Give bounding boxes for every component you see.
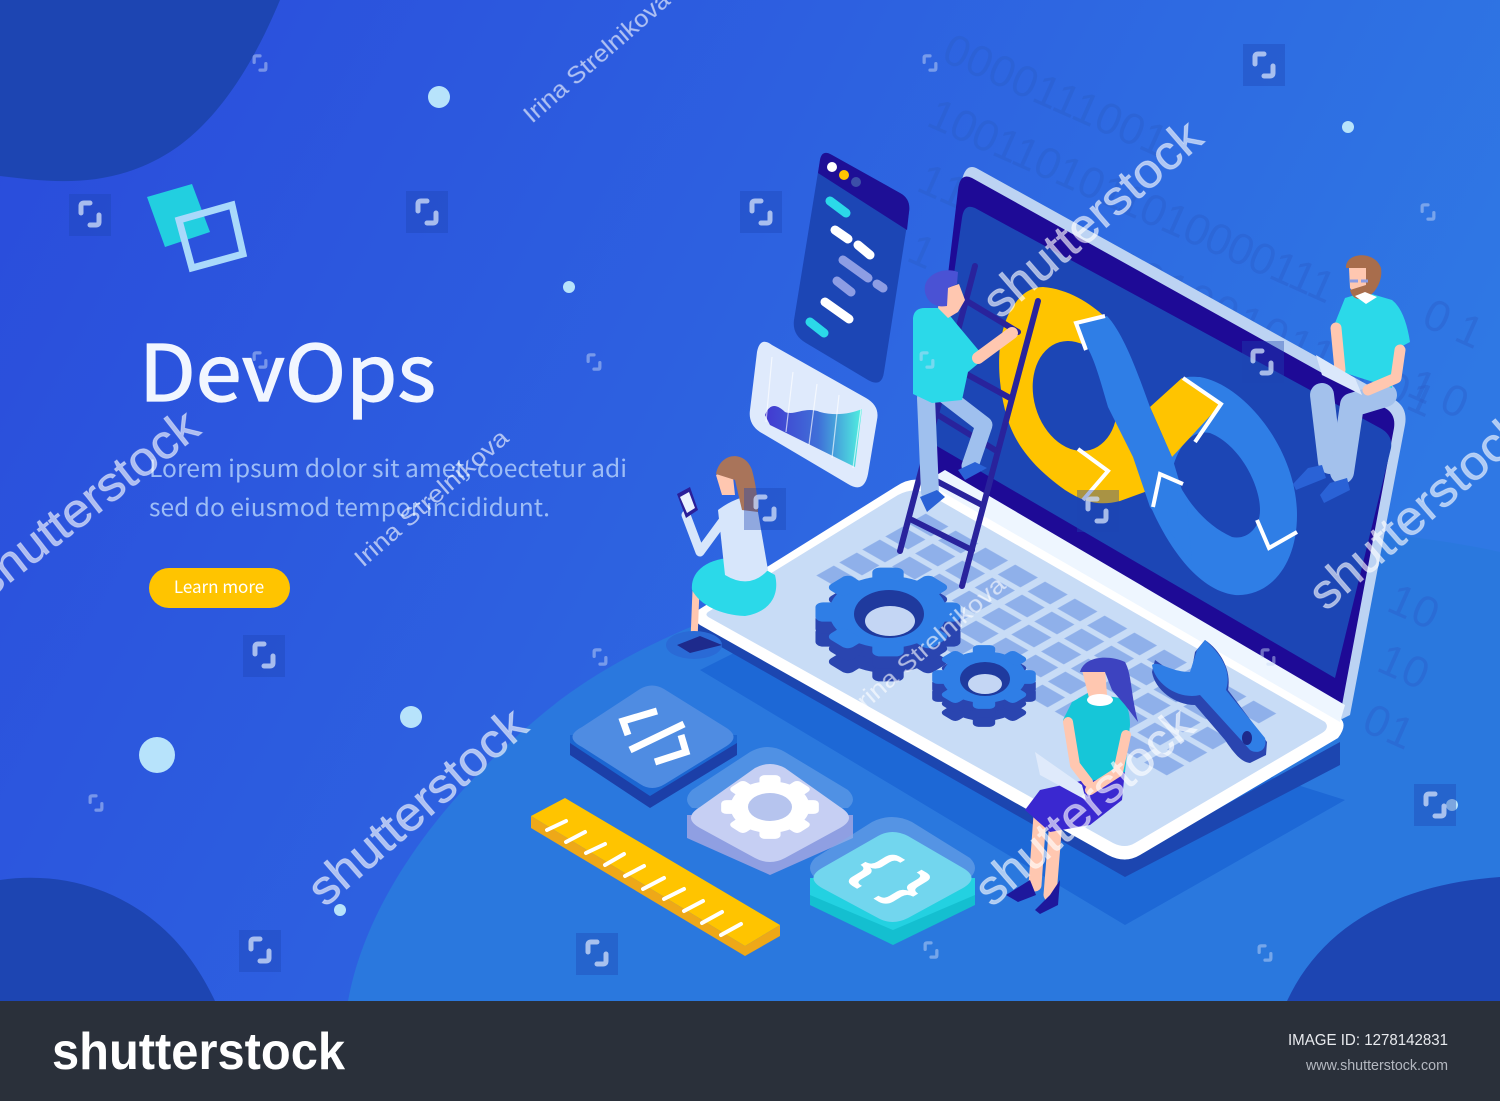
- blue band: [1075, 316, 1192, 560]
- deck: [693, 479, 1344, 860]
- logo: overlapping squares: [147, 184, 243, 268]
- yellow wedge: [1150, 378, 1222, 457]
- watermark text: shutterstock: [972, 109, 1213, 328]
- code panel: [794, 153, 909, 383]
- code glyph: [623, 711, 686, 762]
- watermark text: Irina Strelnikova: [349, 424, 515, 573]
- dots: [139, 86, 1458, 916]
- keyboard: [810, 510, 1283, 779]
- ruler: [531, 798, 780, 956]
- hinge highlight: [925, 470, 1345, 722]
- chart card: [750, 342, 878, 487]
- laptop: [693, 167, 1406, 925]
- body text: Lorem ipsum dolor sit amet, coectetur adi: [149, 449, 627, 484]
- blue ring: [1150, 377, 1297, 595]
- laptop shadow: [700, 625, 1345, 925]
- block: gear: [687, 747, 853, 875]
- person: man on ladder: [913, 270, 1012, 512]
- screen display: [930, 207, 1391, 678]
- screen frame: [925, 176, 1394, 705]
- title: DevOps: [139, 312, 436, 424]
- site url: www.shutterstock.com: [1305, 1058, 1448, 1074]
- binary background text: 10: [901, 224, 1003, 306]
- block: code: [570, 686, 737, 808]
- body text: sed do eiusmod tempor incididunt.: [149, 488, 550, 523]
- gear: small: [932, 645, 1036, 727]
- watermark text: shutterstock: [297, 697, 538, 916]
- watermark text: Irina Strelnikova: [846, 571, 1012, 720]
- binary background text: 110101101010010110001: [911, 154, 1442, 427]
- corner blob top-left: [0, 0, 280, 181]
- binary background text: [901, 24, 1491, 759]
- person: man sitting with laptop: [1293, 255, 1410, 503]
- ladder: [900, 266, 1038, 586]
- binary background text: 01: [1416, 289, 1491, 359]
- footer bar: [0, 1001, 1500, 1101]
- binary background text: 10: [1371, 634, 1437, 699]
- corner blob bottom-right: [1287, 877, 1500, 1001]
- binary background text: 1001101011010000111: [921, 89, 1343, 313]
- person: woman with phone: [666, 456, 776, 659]
- footer logo: shutterstock: [52, 1023, 345, 1081]
- block: braces: [810, 817, 975, 945]
- lower floor shape: [348, 520, 1500, 1001]
- watermark icons: [69, 44, 1456, 975]
- binary background text: 10: [1401, 359, 1476, 429]
- image id: IMAGE ID: 1278142831: [1288, 1032, 1448, 1049]
- corner blob bottom-left: [0, 878, 215, 1001]
- infinity symbol: [999, 287, 1297, 595]
- person: woman on laptop edge: [1006, 658, 1138, 914]
- binary background text: 10: [1381, 574, 1447, 639]
- button: learn more: [149, 568, 290, 608]
- watermark text: shutterstock: [964, 697, 1205, 916]
- yellow loop: [999, 287, 1172, 503]
- binary background text: 01: [1356, 694, 1422, 759]
- button: learn more: Learn more: [174, 573, 264, 598]
- wrench: [1152, 640, 1267, 763]
- laptop base underside: [695, 620, 1340, 877]
- body text: [149, 449, 627, 523]
- braces glyph: { }: [838, 843, 949, 910]
- screen bezel: [930, 167, 1406, 720]
- binary background text: 0000111001: [936, 24, 1175, 167]
- gear: large: [815, 568, 961, 681]
